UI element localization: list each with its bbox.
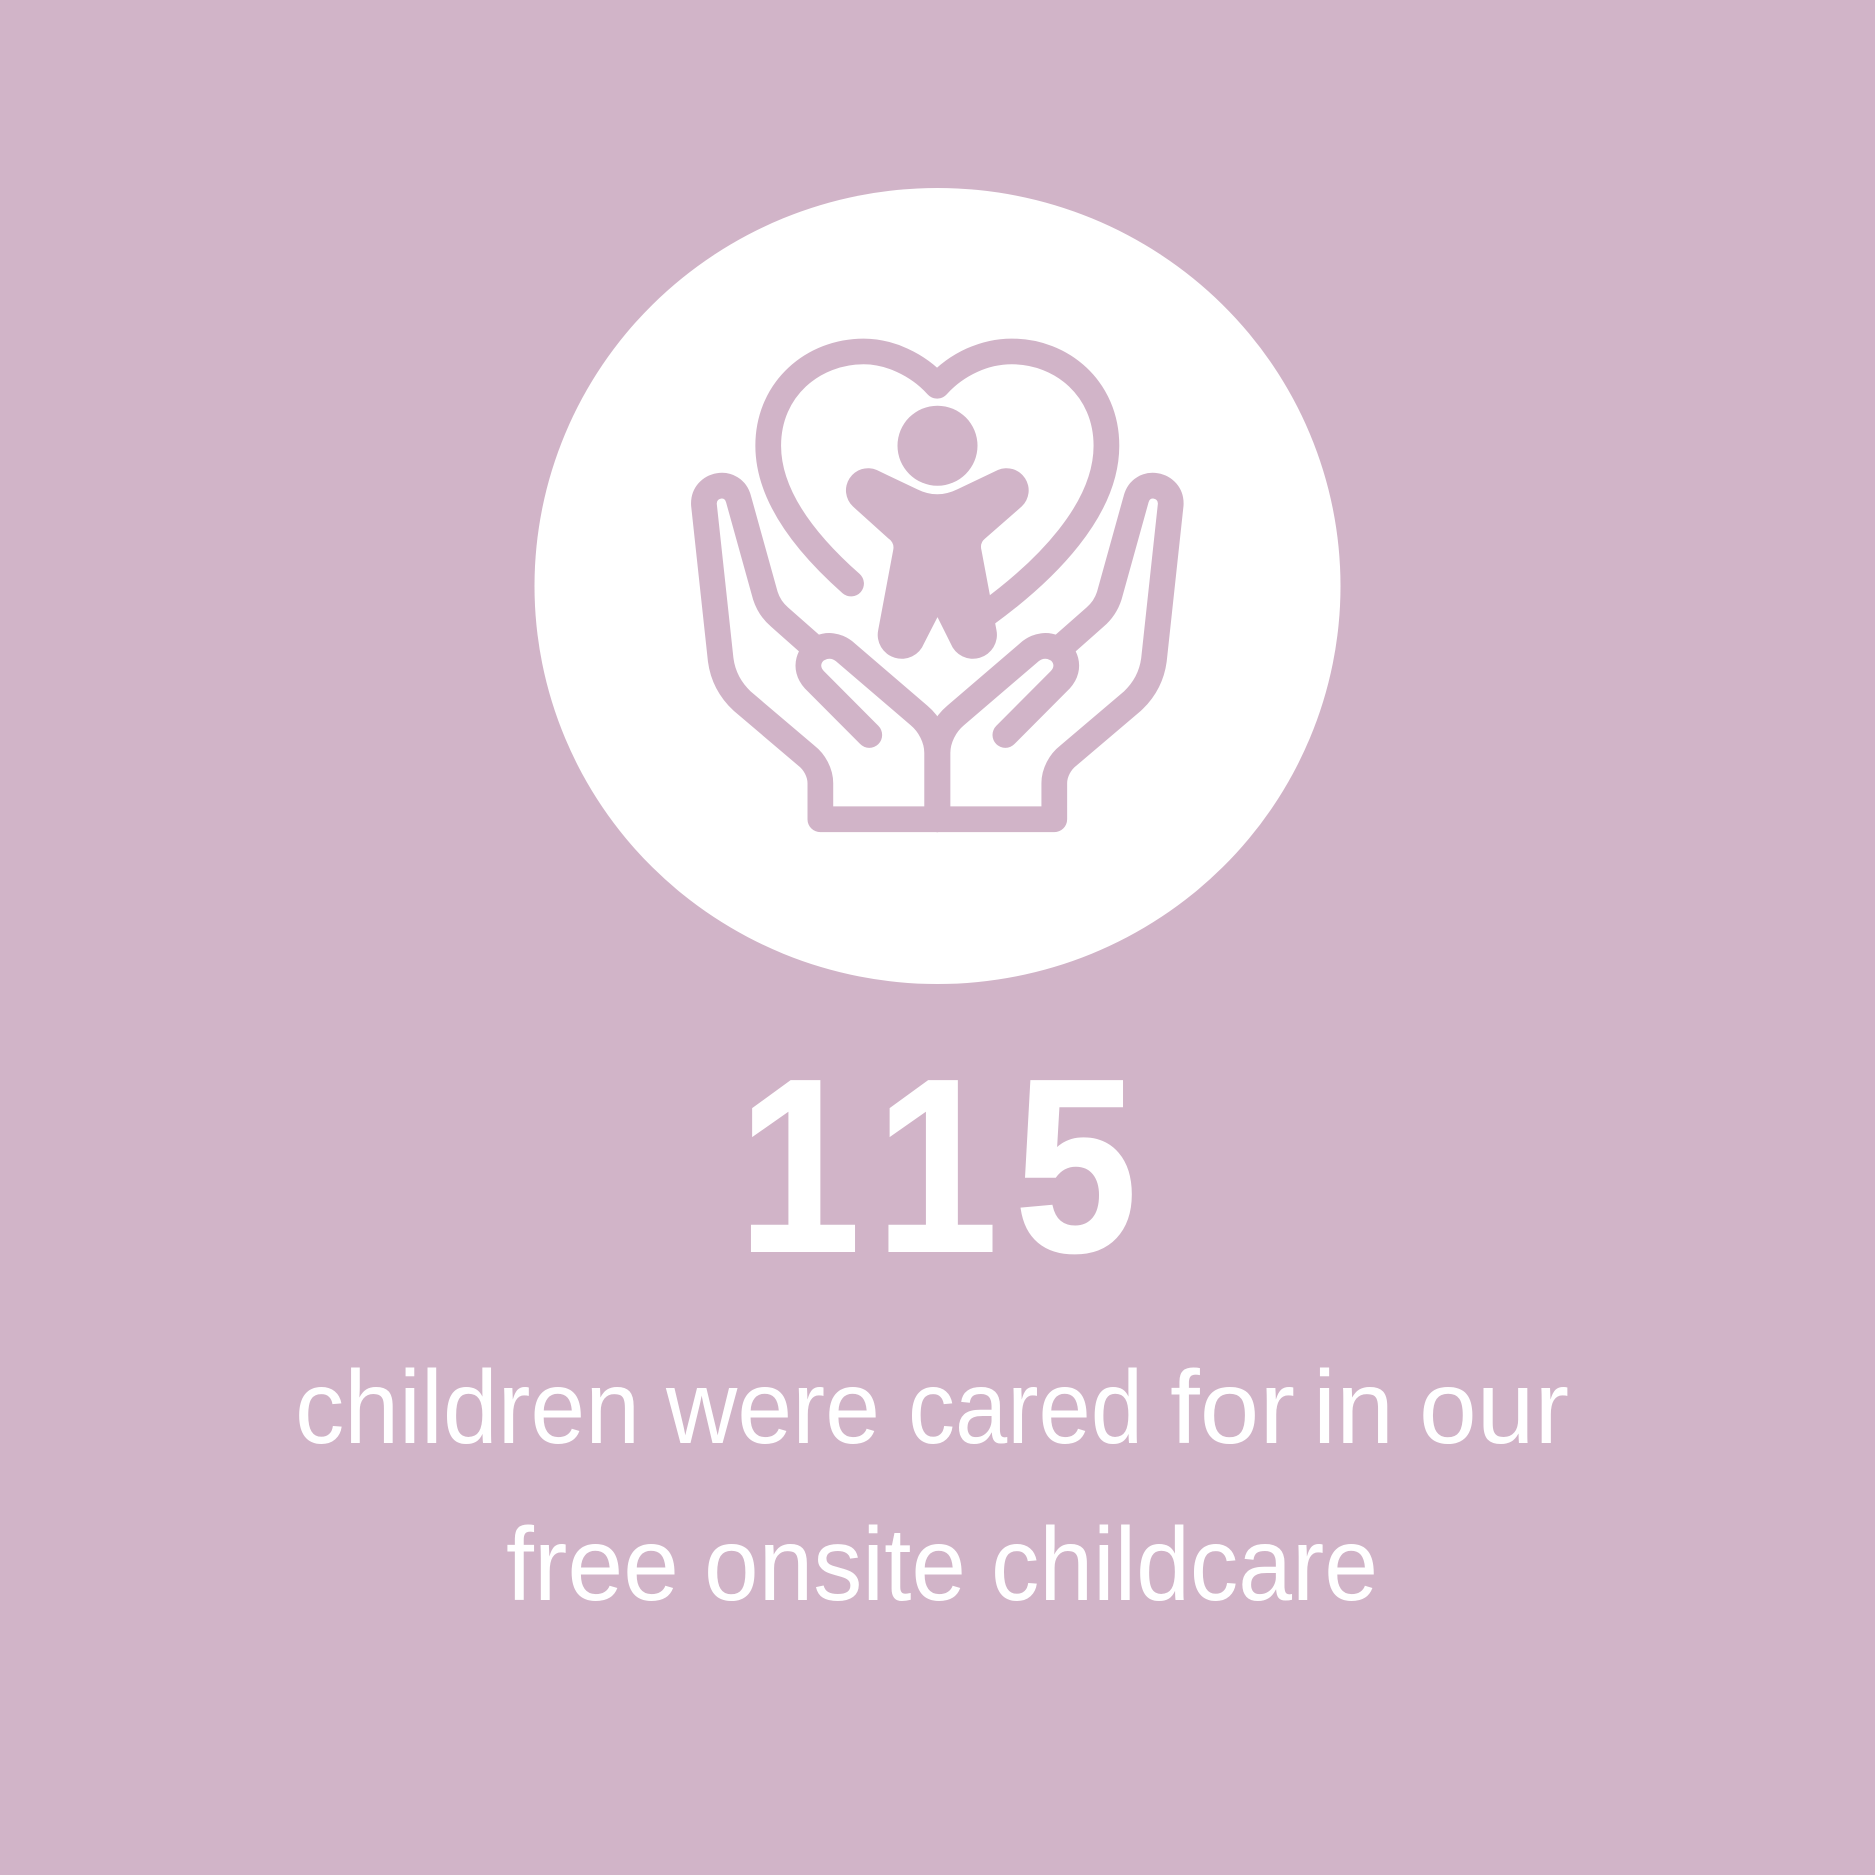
caption line 1: for xyxy=(1170,1350,1295,1466)
icon: hands holding child in heart xyxy=(704,351,1171,819)
caption line 2: onsite xyxy=(704,1507,966,1623)
white circle behind icon xyxy=(534,188,1340,984)
big number: 115 xyxy=(738,1027,1137,1304)
icon part: child body xyxy=(846,468,1029,659)
caption line 1 xyxy=(295,1350,1569,1466)
caption line 2: childcare xyxy=(991,1507,1378,1623)
caption line 1: in xyxy=(1313,1350,1394,1466)
icon part: left hand xyxy=(704,486,937,819)
caption line 2: free xyxy=(506,1507,679,1623)
icon part: child head xyxy=(897,406,977,486)
caption line 1: children xyxy=(295,1350,640,1466)
caption line 2 xyxy=(506,1507,1378,1623)
caption line 1: cared xyxy=(908,1350,1143,1466)
caption line 1: were xyxy=(665,1350,880,1466)
icon part: heart outline xyxy=(768,351,1106,614)
caption line 1: our xyxy=(1419,1350,1569,1466)
icon part: right hand xyxy=(937,486,1171,819)
